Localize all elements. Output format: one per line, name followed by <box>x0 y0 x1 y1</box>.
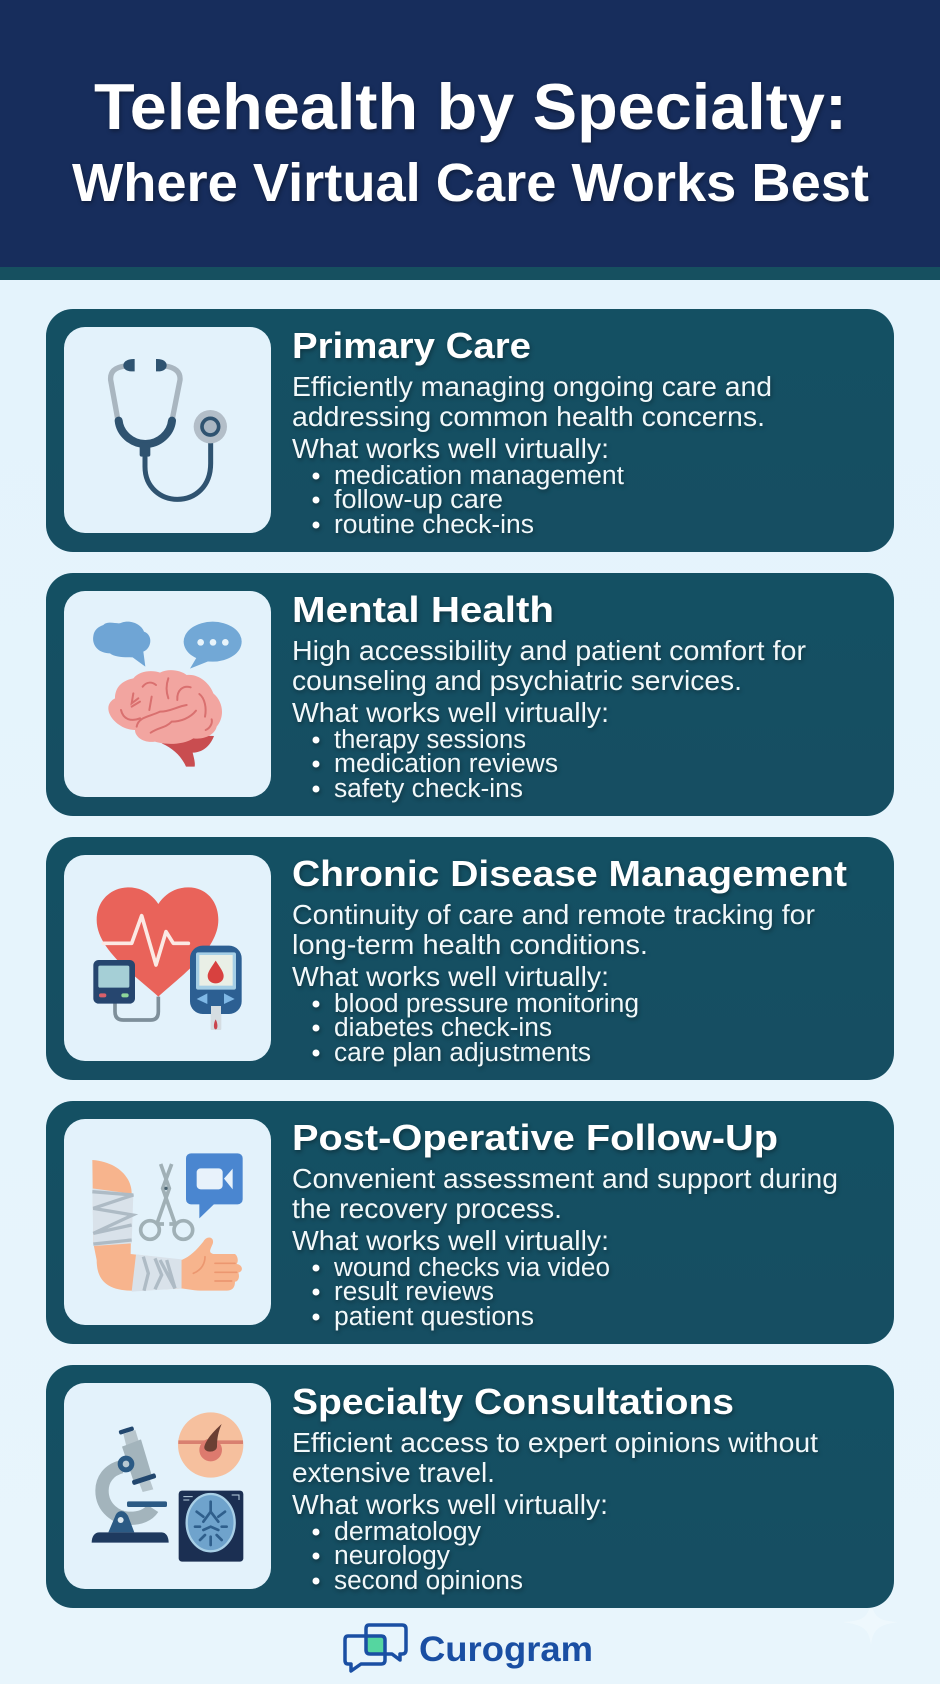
text: chronic disease management: long-term health conditions. <box>292 929 648 960</box>
title <box>72 70 869 213</box>
text: post-operative follow-up: wound checks via video <box>333 1254 610 1282</box>
icon: brain with speech bubbles <box>93 622 242 767</box>
text: primary care: What works well virtually: <box>292 433 609 464</box>
icon: heart and monitors <box>93 887 242 1030</box>
text: specialty consultations <box>292 1381 818 1595</box>
text: primary care: Efficiently managing ongoing care and <box>292 371 772 402</box>
text: chronic disease management: Chronic Disease Management <box>292 853 847 894</box>
icon: stethoscope <box>111 359 227 499</box>
panel: chronic disease management <box>46 837 894 1080</box>
text: mental health: safety check-ins <box>334 775 523 803</box>
text: mental health <box>292 589 806 803</box>
panel: specialty consultations <box>46 1365 894 1608</box>
text: specialty consultations: Efficient access to expert opinions without <box>292 1427 818 1458</box>
text: mental health: High accessibility and patient comfort for <box>292 635 806 666</box>
title: Where Virtual Care Works Best <box>72 153 869 213</box>
text: post-operative follow-up: patient questions <box>334 1303 534 1331</box>
text: mental health: What works well virtually: <box>292 697 609 728</box>
icon: bandaged arm, forceps and video call <box>92 1153 243 1292</box>
panel: primary care <box>46 309 894 552</box>
text: primary care: Primary Care <box>292 325 531 366</box>
text: mental health: counseling and psychiatric services. <box>292 665 742 696</box>
text: primary care <box>292 325 772 539</box>
text: post-operative follow-up <box>292 1117 838 1331</box>
text: primary care: follow-up care <box>334 486 503 514</box>
text: chronic disease management: diabetes check-ins <box>334 1014 552 1042</box>
text: post-operative follow-up: Post-Operative Follow-Up <box>292 1117 778 1158</box>
text: specialty consultations: What works well virtually: <box>292 1489 608 1520</box>
text: chronic disease management: What works well virtually: <box>292 961 609 992</box>
text: chronic disease management <box>292 853 847 1067</box>
text: post-operative follow-up: Convenient assessment and support during <box>292 1163 838 1194</box>
title: Telehealth by Specialty: <box>94 70 847 143</box>
text: post-operative follow-up: What works well virtually: <box>292 1225 609 1256</box>
text: specialty consultations: second opinions <box>334 1567 523 1595</box>
text: chronic disease management: blood pressure monitoring <box>334 990 639 1018</box>
header banner <box>0 0 940 280</box>
text: primary care: routine check-ins <box>334 511 534 539</box>
text: chronic disease management: Continuity of care and remote tracking for <box>292 899 815 930</box>
text: primary care: medication management <box>334 462 624 490</box>
text: chronic disease management: care plan adjustments <box>334 1039 591 1067</box>
text: post-operative follow-up: the recovery process. <box>292 1193 562 1224</box>
logo: Curogram: Curogram <box>419 1630 593 1669</box>
text: specialty consultations: neurology <box>334 1542 450 1570</box>
text: primary care: addressing common health concerns. <box>292 401 765 432</box>
text: specialty consultations: Specialty Consultations <box>292 1381 734 1422</box>
text: mental health: therapy sessions <box>334 726 526 754</box>
panel: post-operative follow-up <box>46 1101 894 1344</box>
icon: microscope, skin and brain scan <box>92 1412 243 1562</box>
text: post-operative follow-up: result reviews <box>334 1278 494 1306</box>
icon: overlapping chat bubbles <box>345 1625 406 1671</box>
logo: Curogram <box>345 1625 593 1671</box>
text: mental health: Mental Health <box>292 589 554 630</box>
text: specialty consultations: dermatology <box>334 1518 481 1546</box>
panel: mental health <box>46 573 894 816</box>
decorative sparkle <box>843 1600 898 1645</box>
text: mental health: medication reviews <box>334 750 558 778</box>
text: specialty consultations: extensive travel. <box>292 1457 495 1488</box>
